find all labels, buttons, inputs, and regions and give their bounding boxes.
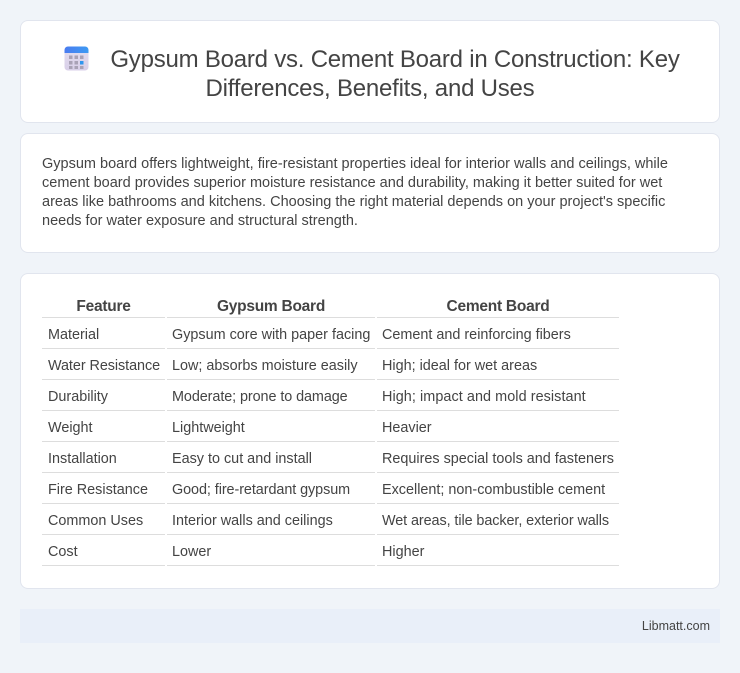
row: Durability: Durability <box>48 389 108 405</box>
intro text <box>42 156 668 229</box>
text: Good; fire-retardant gypsum <box>172 482 350 498</box>
text: Low; absorbs moisture easily <box>172 358 358 374</box>
text: Wet areas, tile backer, exterior walls <box>382 513 609 529</box>
header: Cement Board: Cement Board <box>447 298 549 315</box>
row: Weight <box>42 411 165 442</box>
footer bar <box>20 609 720 643</box>
row: Weight: Weight <box>48 420 93 436</box>
text: Moderate; prone to damage <box>172 389 348 405</box>
text: Lower <box>172 544 211 560</box>
text: Lightweight <box>172 420 245 436</box>
text: Higher <box>382 544 424 560</box>
row: Common Uses: Common Uses <box>48 513 143 529</box>
header panel <box>20 20 720 123</box>
title <box>110 46 680 102</box>
header: Gypsum Board: Gypsum Board <box>217 298 325 315</box>
text: Heavier <box>382 420 432 436</box>
row: Material <box>42 318 165 349</box>
row: Water Resistance <box>42 349 165 380</box>
row: Fire Resistance: Fire Resistance <box>48 482 148 498</box>
icon: calendar <box>64 46 88 70</box>
row: Material: Material <box>48 327 99 343</box>
text: Cement and reinforcing fibers <box>382 327 571 343</box>
header: Feature <box>42 298 165 318</box>
text: Requires special tools and fasteners <box>382 451 614 467</box>
row: Installation <box>42 442 165 473</box>
header: Cement Board <box>377 298 619 318</box>
intro text: Gypsum board offers lightweight, fire-resistant properties ideal for interior walls and ceilings, while <box>42 156 668 172</box>
row: Installation: Installation <box>48 451 117 467</box>
row: Durability <box>42 380 165 411</box>
footer brand: Libmatt.com <box>642 619 710 633</box>
row: Common Uses <box>42 504 165 535</box>
row: Fire Resistance <box>42 473 165 504</box>
text: Interior walls and ceilings <box>172 513 333 529</box>
row: Cost <box>42 535 165 566</box>
row: Cost: Cost <box>48 544 78 560</box>
title: Differences, Benefits, and Uses <box>206 75 534 102</box>
text: High; ideal for wet areas <box>382 358 537 374</box>
intro text: needs for water exposure and structural strength. <box>42 213 358 229</box>
intro panel <box>20 133 720 253</box>
intro text: areas like bathrooms and kitchens. Choosing the right material depends on your project's specific <box>42 194 665 210</box>
text: Excellent; non-combustible cement <box>382 482 605 498</box>
header: Gypsum Board <box>167 298 375 318</box>
table panel <box>20 273 720 589</box>
header: Feature: Feature <box>76 298 131 315</box>
comparison table header <box>42 298 619 318</box>
title: Gypsum Board vs. Cement Board in Construction: Key <box>110 46 680 73</box>
text: Gypsum core with paper facing <box>172 327 370 343</box>
text: Easy to cut and install <box>172 451 312 467</box>
intro text: cement board provides superior moisture resistance and durability, making it better suited for wet <box>42 175 662 191</box>
row: Water Resistance: Water Resistance <box>48 358 160 374</box>
text: High; impact and mold resistant <box>382 389 586 405</box>
